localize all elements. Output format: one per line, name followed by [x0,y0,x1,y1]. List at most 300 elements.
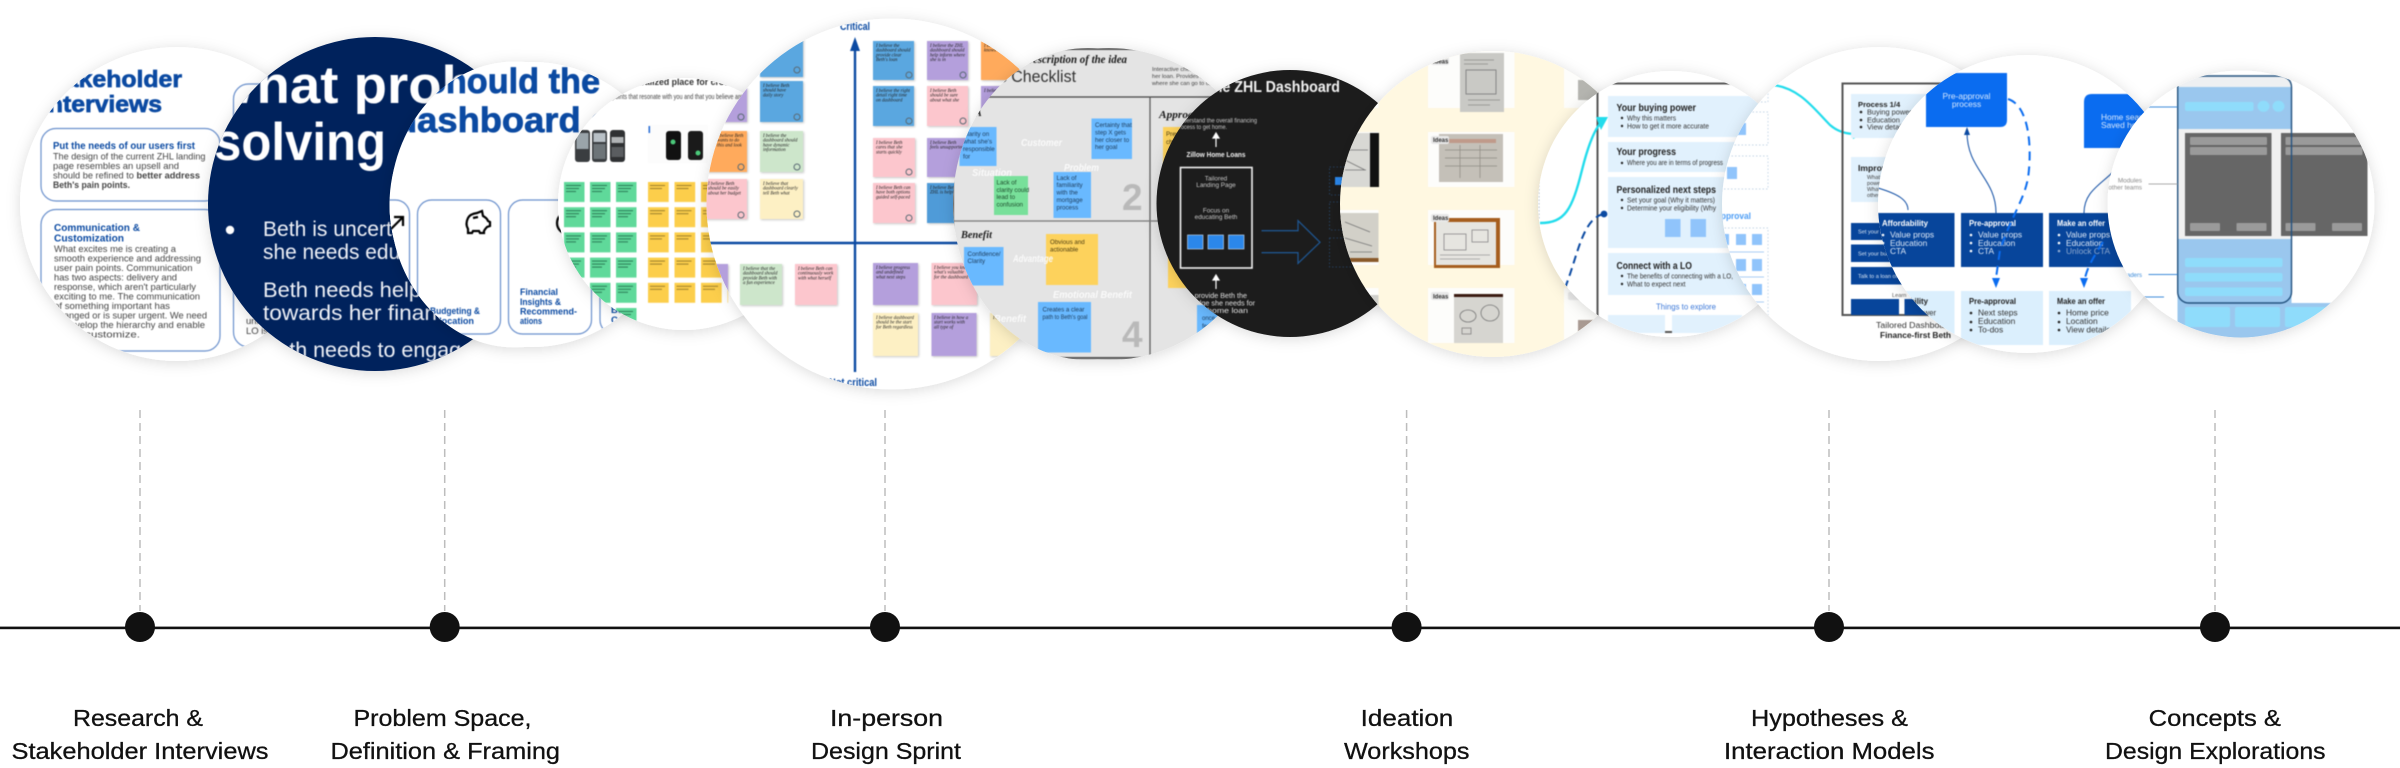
bottom tiles: Learn [1892,293,1906,299]
heading: what problem are we solving: solving [214,113,386,172]
light cards row: To-dos [1978,324,2003,334]
sticky: creates a clear path: path to Beth's goal [1042,314,1088,321]
bottom-right quadrant notes: should be the start [876,321,912,326]
navy cards row: Value props [1890,230,1934,240]
timeline step: ideation workshops [1344,410,1470,764]
section: your progress: Your progress [1616,146,1676,158]
top-right quadrant notes: should be sure [930,94,959,99]
timeline step: problem space [330,410,560,764]
annotation: modules [2108,178,2142,192]
section: your progress: Where you are in terms of progress [1627,158,1723,167]
cyan connector [1773,85,1856,134]
heading: what problem are we solving [216,64,464,172]
description text [1152,66,1210,87]
dotted module boxes [1700,60,1768,317]
section labels in white script: Advantage [1012,253,1053,265]
card: communication and customization: LO to customize. [54,330,140,340]
block: pre-approval process [1926,73,2007,127]
caption: tailored dashboard: Tailored Dashboard [1876,320,1952,330]
top-left quadrant notes: information [763,148,786,153]
timeline step: research and stakeholder interviews [12,410,268,764]
section: personalized next steps [1616,184,1716,237]
section label: approach: Approach [1158,109,1205,121]
bottom-left quadrant notes: I believe Beth can [797,267,833,272]
text: understand financing [1176,118,1257,131]
top-right quadrant notes: detail right time [876,94,908,99]
card: communication and customization: Customization [54,234,124,244]
board heading: A centralized place for cross [615,77,734,88]
caption: tailored dashboard: Finance-first Beth [1880,330,1951,340]
sticky: right column notes: fee [1202,324,1211,330]
card: communication and customization: to develop the hierarchy and enable [54,320,205,331]
panel: interaction model circle [1870,55,2176,353]
bottom-left quadrant notes: I believe that the [742,267,776,272]
top-left quadrant notes: have dynamic [763,143,790,148]
heading mark: A [974,108,982,119]
timeline step: research and stakeholder interviews: Research & [73,705,203,731]
card: communication and customization: response, which aren't particularly [54,282,196,293]
top-right quadrant notes: feels unsupported [930,146,965,151]
sticky: lack of clarity: Lack of [996,180,1017,186]
grey card left [2185,133,2272,236]
timeline step: design sprint: In-person [830,705,943,731]
light cards row: Affordability [1882,296,1928,306]
sticky: lack of familiarity [1054,172,1091,218]
chart axes [710,36,958,373]
top-right quadrant notes: I believe she [983,44,1009,49]
navy cards row: Education [1978,238,2016,248]
top-left quadrant notes: about her budget [708,191,741,196]
section: connect with a LO [1616,260,1733,288]
label: budgeting coach [610,306,622,322]
top-left quadrant notes: I believe the [762,134,787,139]
top-right quadrant notes [873,41,1022,223]
bottom-right quadrant notes: what's valuable [934,271,965,276]
timeline step: ideation workshops: Ideation [1361,705,1453,731]
sticky: clarity: for [963,154,970,160]
bottom-left quadrant notes: dashboard should [743,272,778,277]
axis label: critical: Critical [840,21,870,33]
top-right quadrant notes: I believe Beth [929,186,957,191]
navy connectors [1878,132,2113,213]
sticky: clarity [960,127,996,166]
block: home search: Home search [2101,112,2151,122]
top-left quadrant notes: dashboard should [763,139,798,144]
bullet list: she needs education [263,241,456,264]
section labels in white script: Customer [1021,137,1063,149]
sketch photo 3 [1434,218,1500,268]
light cards row: Buying power [1890,308,1936,318]
light cards row: Home price [2066,308,2109,318]
sketch photo 2 [1439,134,1503,182]
arrow head: dashed pre-approval [1992,278,2000,288]
right edge arc [2375,172,2378,236]
card: put the needs of our users first [41,128,220,201]
board heading: Find points that resonate with you and that you believe are [600,92,743,101]
timeline step: concepts and design explorations: Design Explorations [2105,738,2326,764]
light cards row: Location [2066,316,2098,326]
top-right quadrant notes: I believe Beth [929,141,957,146]
section: connect with a LO: Connect with a LO [1616,260,1692,272]
tags: ideas: Ideas [1433,216,1449,222]
block: home search [2084,94,2152,148]
panel: checklist worksheet circle [949,46,1222,367]
bottom-right quadrant notes: for Beth regardless [876,325,913,330]
sticky: lack of clarity [994,176,1030,215]
bottom-right quadrant notes: what next steps [876,275,905,280]
arrow head: up to pre-approval process [1964,127,1970,135]
heading: description of the idea: Description of the idea [1024,54,1127,66]
text: understand financing: process to get home. [1176,124,1227,131]
section: personalized next steps: Set your goal (Why it matters) [1627,196,1715,204]
header bar [2185,101,2284,112]
navy cards row: Affordability [1882,218,1928,228]
card: improve [1851,157,1951,202]
landing page diagram: Tailored [1205,176,1228,182]
sticky: lack of familiarity: familiarity [1056,182,1084,189]
timeline step: hypotheses and interaction models: Interaction Models [1724,738,1934,764]
card: process 1/4: Buying power [1867,108,1912,116]
heading: should the dashboard of: dashboard of [395,101,625,140]
sticky: right column notes: once [1202,316,1216,322]
block: pre-approval process: Pre-approval [1943,91,1991,101]
cyan connector [1540,119,1606,223]
top-right quadrant notes: I believe the [875,44,900,49]
bottom-left quadrant notes [700,264,837,305]
arrow up to Zillow Home Loans [1213,133,1219,147]
heading: checklist: Beth's Checklist [963,67,1076,86]
dashed blue connector to make an offer [2085,242,2103,278]
label: budgeting and allocation [430,306,480,325]
card: communication and customization: changed or is super urgent. We need [54,310,207,322]
top-left quadrant notes: I believe that [762,182,789,187]
quadrant number 4: 4 [1122,314,1143,355]
panel: post-it voting board circle [554,76,747,337]
sticky: lack of familiarity: process [1056,204,1078,212]
text: provide Beth knowledge: her home loan [1192,306,1248,315]
second column cards: unless [246,316,274,327]
sticky: creates a clear path [1038,302,1091,352]
label: budgeting and allocation: Allocation [430,316,474,327]
top-right quadrant notes: knows what [984,49,1007,54]
sticky: right column notes: Prev [1166,131,1180,138]
annotation: headers: Headers [2119,273,2142,279]
panel: what problem are we solving circle [203,34,479,378]
wireframe frame [1842,84,2000,315]
label: budgeting coach: Coach [611,315,640,326]
bullet list: Beth needs to engage [263,339,473,362]
card: process 1/4: Education [1867,116,1900,124]
section label: benefit: Benefit [960,229,993,241]
sticky: lack of familiarity: with the [1056,190,1078,196]
action rows: Set your goal [1858,230,1891,236]
section labels in white script: Problem [1064,162,1099,174]
panel: dashboard circle [387,59,628,354]
light cards row [1880,291,2131,345]
bottom-right quadrant notes: start works with [934,321,966,326]
bottom-right quadrant notes: I believe progress [875,266,910,271]
card: process 1/4 [1851,94,1951,138]
bottom-right quadrant notes: and undefined [876,271,904,276]
bullet list [226,218,473,362]
top-right quadrant notes: she is in [930,58,946,63]
label: budgeting coach: Budget [611,305,645,316]
top-left quadrant notes: tell Beth what [763,191,790,196]
heading: should the dashboard of: Should the [423,62,600,101]
left column photos [1340,133,1379,345]
annotation: modules: Modules [2118,178,2142,184]
description text: where she can go to complete [1151,81,1229,87]
card: improve: Improve [1858,163,1892,173]
label: financial insights: Recommend- [520,306,577,318]
timeline step: ideation workshops: Workshops [1344,738,1470,764]
white sketch cards [1335,50,1600,343]
dashed destination boxes [1330,167,1370,267]
yellow sticky notes [648,182,728,303]
top-left quadrant notes: wants to do [717,139,740,144]
section cards [1608,96,1812,333]
label: financial insights: Financial [520,287,558,298]
navy dashed connector [1565,214,1603,288]
second column cards [232,82,268,347]
timeline step: concepts and design explorations: Concepts & [2149,705,2281,731]
card: communication and customization: Communication & [54,223,140,234]
icon: piggy bank [466,211,490,233]
top-right quadrant notes: have both options [876,191,910,196]
top-right quadrant notes: I believe the right [875,89,911,94]
second column cards: LO is [246,326,268,337]
top-right quadrant notes: starts quickly [876,150,903,155]
bottom tiles [1851,293,1952,315]
sticky: clarity: responsible [963,146,995,153]
timeline step: design sprint [811,410,961,764]
tags: ideas: Ideas [1433,138,1449,144]
timeline step: hypotheses and interaction models: Hypotheses & [1751,705,1908,731]
bottom-left quadrant notes: provide Beth with [742,276,778,281]
sticky: confidence: Confidence/ [968,251,1001,258]
section: personalized next steps: Personalized next steps [1616,184,1716,196]
sticky: creates a clear path: Creates a clear [1042,306,1084,314]
section labels in white script: Benefit [994,313,1026,325]
landing page diagram: Landing Page [1196,182,1236,189]
tags: ideas: Ideas [1433,294,1449,300]
bottom-right quadrant notes: all type of [934,325,954,330]
top-right quadrant notes: on dashboard [876,98,903,103]
top-left quadrant notes: daily story [763,93,784,98]
top-right quadrant notes: help inform where [930,53,966,58]
section labels in white script [972,137,1132,325]
panel: dashboard structure circle [1538,71,1812,337]
landing page diagram: Focus on [1203,208,1230,214]
block: pre-approval process: process [1952,99,1981,109]
tags: ideas: Ideas [1433,60,1449,66]
action rows: Talk to a loan officer [1858,274,1908,280]
label: Zillow Home Loans: Zillow Home Loans [1186,152,1246,159]
landing page diagram [1180,168,1252,268]
panel: ZHL dashboard dark circle [1156,70,1424,337]
top-right quadrant notes: dashboard should [876,49,911,54]
navy cards row: CTA [1890,246,1907,256]
dotted column edge [1538,175,1540,220]
light cards row: Make an offer [2057,296,2106,306]
navy cards row: Value props [1978,230,2022,240]
bullet list: towards her financial [263,302,471,325]
panel: stakeholder interviews circle [16,44,272,368]
card: put the needs of our users first: should be refined to better address [53,170,200,182]
sticky: certainty: her closer to [1095,137,1130,144]
sticky: confidence [964,247,1004,286]
sticky: confidence: Clarity [968,258,986,265]
light cards row: Pre-approval [1969,296,2016,306]
panel: prioritisation matrix circle [702,16,1024,396]
tags: ideas [1431,57,1449,300]
navy cards row: Education [1890,238,1928,248]
navy cards row: Unlock CTA [2066,246,2110,256]
card: process 1/4: Process 1/4 [1858,100,1901,109]
sticky: obvious and actionable [1046,234,1098,285]
connector dot [1601,211,1607,217]
annotation lines [2144,107,2178,297]
grey card right [2281,133,2368,236]
top-right quadrant notes: guided self-paced [876,195,911,200]
timeline step: problem space: Problem Space, [354,705,532,731]
timeline axis [0,627,2400,629]
section: your buying power: Why this matters [1627,114,1676,122]
bottom-right quadrant notes: I believe dashboard [875,316,915,321]
sketch photo 1 [1460,53,1504,112]
section: your buying power [1616,102,1709,130]
card: communication and customization: user pain points. Communication [54,263,192,274]
green sticky notes [564,182,637,328]
timeline step: research and stakeholder interviews: Stakeholder Interviews [12,738,268,764]
bottom-left quadrant notes: with what herself [798,276,832,281]
cyan arrow head [1596,117,1608,130]
label: financial insights: ations [520,316,542,327]
worksheet frame [953,48,1212,360]
bottom-right quadrant notes: I believe in how a [933,316,969,321]
module dividers [1720,252,1764,302]
card: put the needs of our users first: page resembles an upsell and [53,161,179,172]
card: communication and customization: has two aspects: delivery and [54,272,177,284]
label: financial insights [520,287,577,327]
top-right quadrant notes: cares that she [876,146,903,151]
card: put the needs of our users first: Put the needs of our users first [53,141,196,152]
navy cards row: Education [2066,238,2104,248]
heading: the ZHL dashboard: The ZHL Dashboard [1205,79,1340,96]
text: provide Beth knowledge: To provide Beth the [1185,291,1247,300]
card: improve: other [1867,193,1880,199]
bullet list: Beth is uncertain [263,218,420,241]
section: connect with a LO: What to expect next [1627,280,1686,288]
phone outline [2178,76,2292,303]
arrow head: dashed make an offer [2080,278,2088,288]
card: improve: What [1867,175,1881,181]
description text: her loan. Provides info [1152,74,1210,80]
bottom-right quadrant notes [873,263,1032,356]
sticky: certainty: her goal [1095,144,1117,151]
feature cards [390,198,604,336]
top-left quadrant notes: dashboard clearly [763,187,799,192]
card: put the needs of our users first: Beth's pain points. [53,180,130,191]
section labels in white script: Emotional Benefit [1053,289,1132,301]
section: your buying power: Your buying power [1616,102,1696,114]
note markers [738,67,966,221]
block: home search: Saved homes [2101,120,2152,130]
label: pre-approval: Pre-approval [1700,211,1751,222]
top-left quadrant notes: I believe Beth [716,134,744,139]
caption: tailored dashboard [1876,320,1952,340]
axis label: not critical: Not critical [829,377,877,389]
phone thumbnails: dark app [648,125,704,161]
navy cards row: Value props [2066,230,2110,240]
heading: should the dashboard of [407,66,600,134]
sticky: obvious and actionable: Obvious and [1050,239,1085,246]
sticky: clarity: Clarity on [963,131,990,138]
text: provide Beth knowledge: knowledge she needs for [1175,298,1256,308]
sticky: obvious and actionable: actionable [1050,246,1079,254]
blue square [1335,177,1344,185]
annotation: modules: other teams [2108,184,2142,192]
panel: tailored dashboard circle [1700,47,2036,361]
light cards row: View details [2066,324,2111,334]
light cards row: Education [1978,316,2016,326]
label: budgeting and allocation: Budgeting & [430,306,480,317]
section: your progress [1616,146,1723,167]
module bars [2185,258,2330,327]
bottom-left quadrant notes: a fun experience [743,281,776,286]
dashed blue connector to pre-approval [1996,99,2030,278]
text: understand financing: Understand the overall financing [1176,118,1257,124]
sticky: certainty [1092,118,1132,159]
card: process 1/4: View details [1867,122,1907,132]
card: communication and customization: smooth experience and addressing [54,254,201,264]
top-right quadrant notes: I believe Beth can [875,186,911,191]
section labels in white script: Situation [972,167,1012,179]
board heading [612,78,742,101]
label: financial insights: Insights & [520,297,561,308]
sticky: lack of clarity: clarity could [996,187,1030,194]
heading: stakeholder interviews [49,68,183,114]
card: communication and customization: of something important has [54,301,170,312]
module squares [1720,123,1762,295]
sticky: certainty: step X gets [1095,130,1126,136]
top-left quadrant notes: should have [763,89,787,94]
card: improve: What [1867,187,1881,193]
timeline step: hypotheses and interaction models [1724,410,1934,764]
panel: concept wireframe circle [2108,70,2381,339]
sticky: lack of clarity: confusion [996,202,1024,208]
device frame [1598,84,1812,332]
heading: stakeholder interviews: Stakeholder [40,66,182,92]
bottom-right quadrant notes: I believe you know [933,266,971,271]
bottom-left quadrant notes: continuously work [798,272,834,277]
light cards row: Next steps [1978,308,2018,318]
top-left quadrant notes: this and look [717,143,743,148]
sketch photo 4 [1454,294,1503,343]
sticky: right column notes [1163,127,1247,345]
sticky: lack of clarity: lead to [996,194,1016,201]
top-right quadrant notes: ZHL is helping [930,191,959,196]
sticky: clarity: what she's [962,138,992,146]
description text: Interactive checklist for [1152,67,1211,73]
landing page diagram: educating Beth [1195,214,1238,221]
card: improve: power [1867,181,1882,187]
arrow up from beth note [1213,275,1219,289]
bottom-right quadrant notes: I believe [992,316,1010,321]
heading: stakeholder interviews: Interviews [41,91,162,117]
card: put the needs of our users first: The design of the current ZHL landing [53,152,206,162]
text: provide Beth knowledge [1175,291,1256,315]
